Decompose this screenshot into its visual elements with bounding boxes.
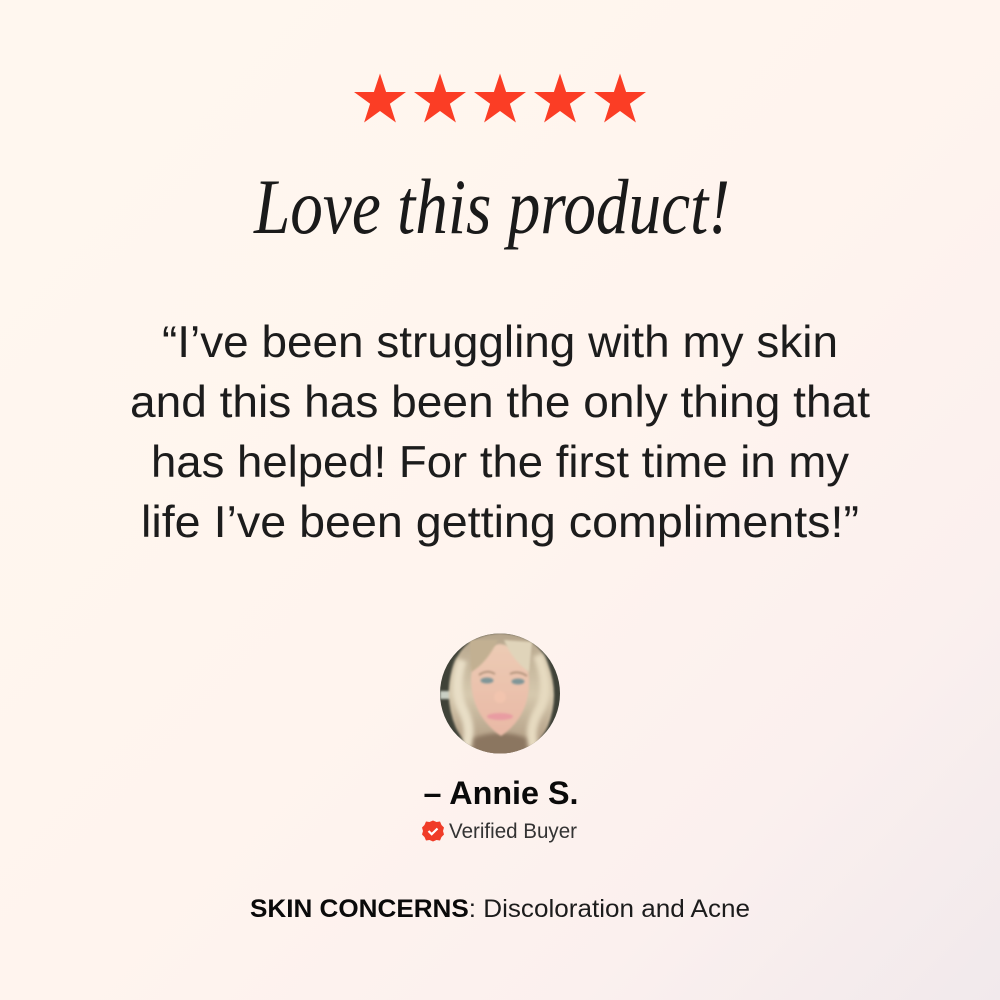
review quote bbox=[130, 318, 871, 547]
review quote: has helped! For the first time in my bbox=[151, 438, 850, 487]
skin concerns: SKIN CONCERNS : Discoloration and Acne bbox=[250, 895, 750, 923]
review quote: life I’ve been getting compliments!” bbox=[141, 498, 859, 547]
verified buyer label: Verified Buyer bbox=[449, 820, 577, 843]
review quote: and this has been the only thing that bbox=[130, 378, 871, 427]
icon: verified badge bbox=[422, 820, 444, 842]
review quote: “I’ve been struggling with my skin bbox=[162, 318, 838, 367]
reviewer name: – Annie S. bbox=[424, 775, 578, 811]
star rating bbox=[354, 74, 646, 122]
avatar photo bbox=[440, 633, 560, 760]
title: Love this product! bbox=[253, 163, 730, 250]
